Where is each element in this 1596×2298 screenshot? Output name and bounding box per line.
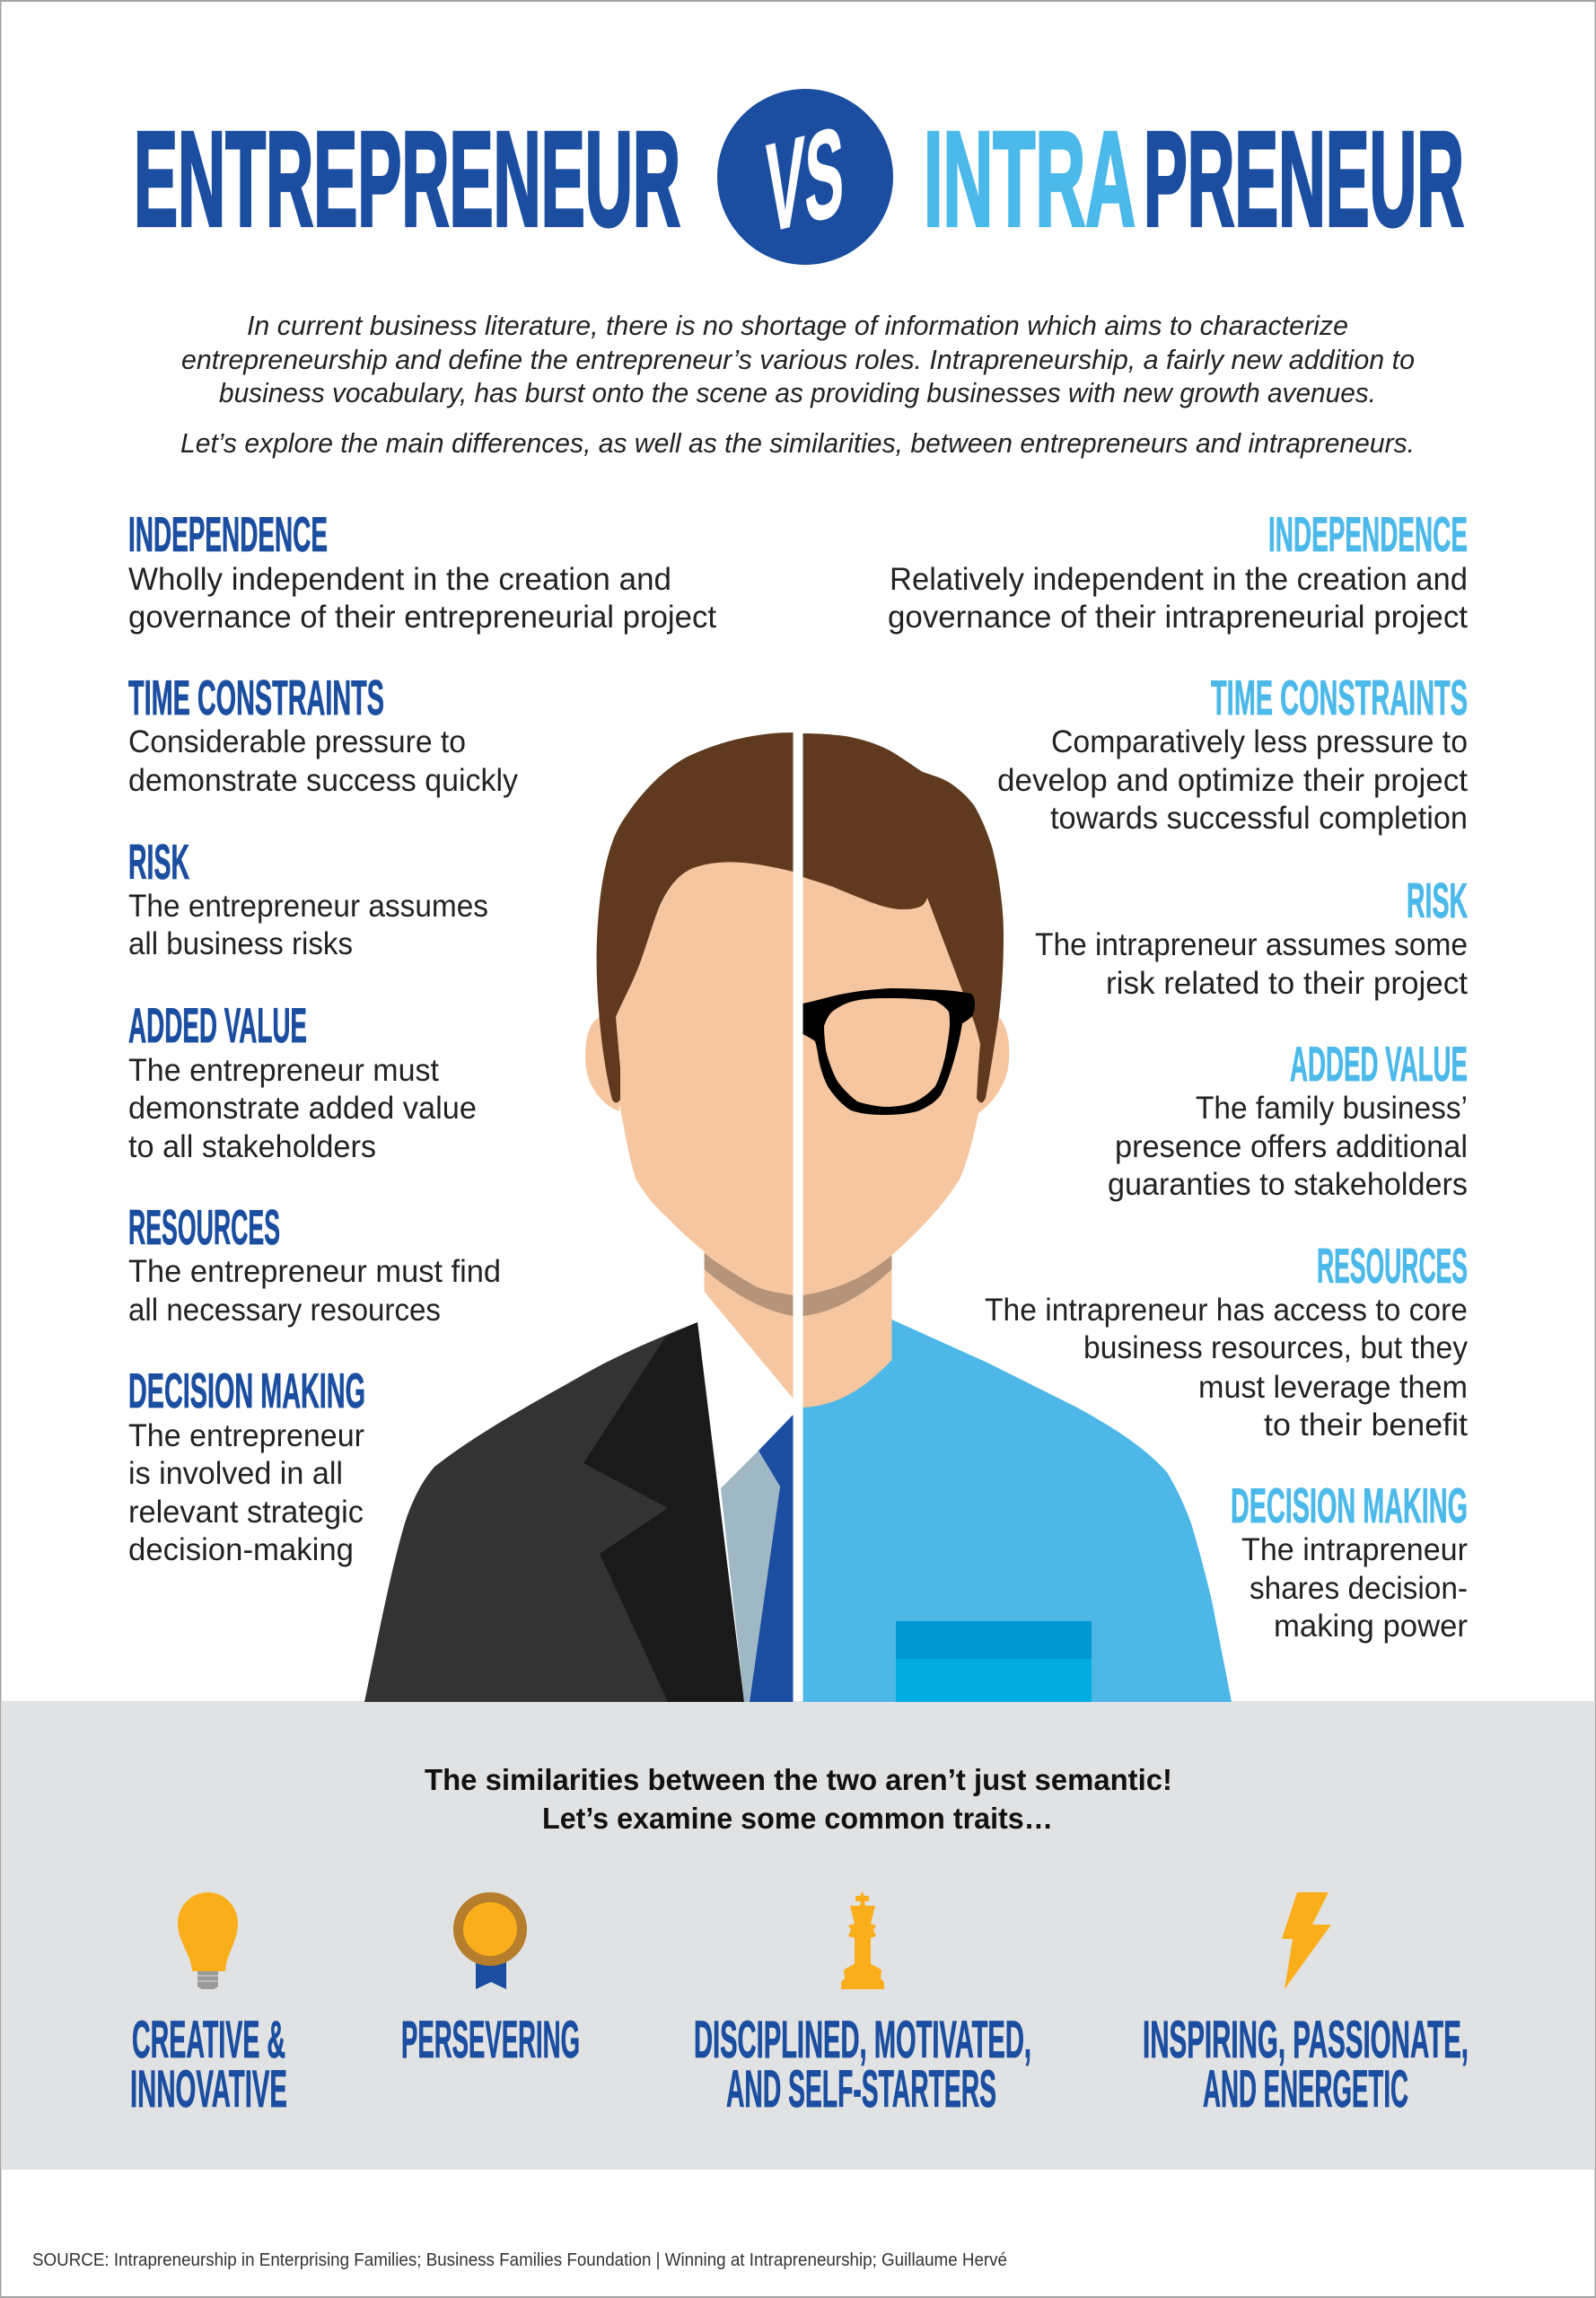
intro text: In current business literature, there is no shortage of information which aims to characterize [247,310,1348,341]
resources: all necessary resources [128,1293,441,1328]
intro text: Let’s explore the main differences, as well as the similarities, between entrepreneurs and intrapreneurs. [180,427,1415,459]
added value: demonstrate added value [128,1091,477,1126]
entrepreneur half: tie [750,1415,794,1702]
decision making: DECISION MAKING [128,1363,365,1418]
similarities heading [425,1763,1172,1835]
similarities heading: The similarities between the two aren’t just semantic! [425,1763,1172,1796]
risk: risk related to their project [1106,966,1468,1001]
intro text [180,310,1415,459]
intrapreneur half: ear [974,1017,1009,1113]
label: inspiring [1143,2011,1469,2118]
panel: entrepreneur traits [128,506,716,1567]
decision making: shares decision- [1250,1571,1468,1606]
entrepreneur half: neck [705,1239,794,1399]
icon: lightning bolt [1282,1892,1331,1989]
intro text: entrepreneurship and define the entrepreneur’s various roles. Intrapreneurship, a fairly new addition to [181,344,1415,375]
similarities panel [130,1763,1469,2118]
entrepreneur half: ear [585,1017,619,1111]
source line: SOURCE: Intrapreneurship in Enterprising Families; Business Families Foundation | Winning at Intrapreneurship; Guillaume Hervé [32,2250,1007,2270]
time constraints: Considerable pressure to [128,724,466,759]
decision making: is involved in all [128,1456,343,1491]
risk [128,834,488,961]
decision making: The entrepreneur [128,1418,364,1453]
decision making: making power [1274,1609,1468,1644]
resources: RESOURCES [128,1199,280,1255]
intrapreneur half: pocket [896,1621,1092,1702]
intrapreneur half: shirt [802,1320,1232,1702]
time constraints: towards successful completion [1050,801,1468,836]
independence [128,506,716,635]
independence: governance of their intrapreneurial project [888,600,1468,635]
label: disciplined [694,2011,1031,2118]
added value [128,997,477,1164]
resources: The intrapreneur has access to core [985,1293,1468,1328]
added value: The entrepreneur must [128,1053,439,1088]
icon: light bulb [178,1892,238,1989]
added value: The family business’ [1196,1091,1468,1126]
entrepreneur half: hair [597,732,794,1102]
independence: governance of their entrepreneurial project [128,600,716,635]
intrapreneur half: hair [802,733,1004,1102]
similarities heading: Let’s examine some common traits… [542,1802,1053,1835]
label: disciplined: DISCIPLINED, MOTIVATED, [694,2011,1031,2069]
intrapreneur half: neck shadow [802,1253,892,1316]
decision making: The intrapreneur [1241,1532,1468,1567]
risk: The entrepreneur assumes [128,889,488,924]
person illustration [364,732,1232,1702]
label: disciplined: AND SELF-STARTERS [726,2060,996,2118]
entrepreneur half: lapel [583,1322,744,1702]
time constraints [128,670,518,798]
vs badge [717,89,893,265]
entrepreneur half: jacket [364,1322,744,1702]
independence: INDEPENDENCE [128,506,328,562]
intrapreneur half: face [802,862,983,1294]
resources: must leverage them [1198,1370,1468,1405]
vs badge: VS [766,100,844,260]
entrepreneur half: tie shade [721,1451,780,1702]
independence: Wholly independent in the creation and [128,562,671,597]
added value: ADDED VALUE [128,997,307,1053]
resources: business resources, but they [1083,1330,1468,1365]
resources [128,1199,501,1328]
time constraints: Comparatively less pressure to [1051,724,1468,759]
risk [1035,873,1468,1001]
title: ENTREPRENEUR [134,103,680,254]
title: intra: INTRA [924,103,1136,254]
intrapreneur half: glasses [802,988,975,1115]
decision making: relevant strategic [128,1495,364,1530]
time constraints [997,670,1468,836]
added value [1108,1036,1468,1202]
entrepreneur half: face [610,853,794,1294]
time constraints: develop and optimize their project [997,763,1468,798]
added value: guaranties to stakeholders [1108,1167,1468,1202]
risk: RISK [1407,873,1468,928]
decision making [1231,1478,1468,1644]
decision making: decision-making [128,1532,354,1567]
independence [888,506,1468,635]
label: creative and innovative [130,2011,287,2118]
icon: chess king [841,1891,884,1989]
decision making [128,1363,365,1567]
independence: Relatively independent in the creation and [890,562,1468,597]
added value: to all stakeholders [128,1129,376,1164]
icon: medal [453,1892,527,1989]
entrepreneur half: neck shadow [705,1253,794,1316]
intro text: business vocabulary, has burst onto the scene as providing businesses with new growth avenues. [219,377,1376,408]
grey similarities band [1,1701,1595,2170]
similarities panel: CREATIVE & [132,2011,285,2069]
risk: The intrapreneur assumes some [1035,927,1468,962]
added value: presence offers additional [1115,1129,1468,1164]
intrapreneur half: neck [802,1257,892,1414]
resources: to their benefit [1264,1408,1468,1443]
time constraints: demonstrate success quickly [128,763,518,798]
similarities panel: PERSEVERING [401,2011,580,2069]
resources [985,1238,1468,1443]
risk: all business risks [128,926,353,961]
panel: intrapreneur traits [888,506,1468,1644]
risk: RISK [128,834,189,890]
resources: The entrepreneur must find [128,1254,501,1289]
label: creative and innovative: INNOVATIVE [130,2060,287,2118]
time constraints: TIME CONSTRAINTS [128,670,384,725]
